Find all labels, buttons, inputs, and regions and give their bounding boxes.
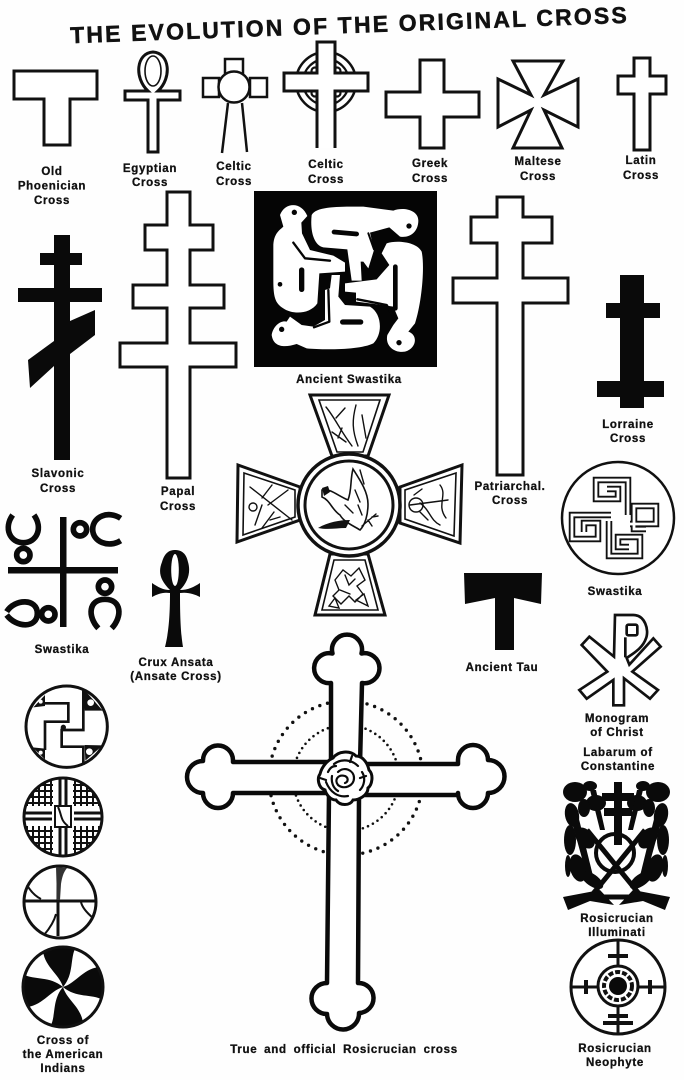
label: Lorraine Cross: Lorraine (602, 419, 654, 431)
label: Maltese Cross: Maltese (514, 156, 562, 168)
panel: Ancient Swastika (254, 191, 437, 386)
cross: Maltese (498, 61, 578, 183)
cross: Papal (120, 192, 236, 513)
emblem: Rosicrucian Illuminati (563, 781, 670, 939)
cross: Old Phoenician (14, 71, 97, 207)
cross: true and official Rosicrucian cross (187, 635, 504, 1056)
left foliage (563, 781, 614, 910)
medal rings (298, 454, 400, 556)
label: Swastika: Swastika (35, 644, 89, 656)
creases and eyes (293, 232, 395, 327)
label: Greek Cross: Greek (412, 158, 448, 170)
corner marks (33, 689, 103, 761)
medal: cross with dove (237, 395, 462, 615)
label: Celtic Cross ring: Celtic (308, 159, 344, 171)
label: Labarum of Constantine: Constantine (581, 761, 655, 773)
label: Old Phoenician Cross: Old (41, 166, 63, 178)
cross: Celtic (203, 59, 267, 188)
label: Rosicrucian Illuminati: Illuminati (588, 927, 646, 939)
label: Celtic Cross: Cross (216, 176, 252, 188)
label: Papal Cross: Cross (160, 501, 196, 513)
label: Ancient Tau: Ancient Tau (466, 662, 538, 674)
emblem: Indian cross one (26, 686, 107, 767)
label: Old Phoenician Cross: Cross (34, 195, 70, 207)
label: Egyptian Cross: Cross (132, 177, 168, 189)
label: Rosicrucian Neophyte: Rosicrucian (578, 1043, 652, 1055)
label: Celtic Cross: Celtic (216, 161, 252, 173)
cross: Lorraine (597, 275, 664, 445)
label: Egyptian Cross: Egyptian (123, 163, 177, 175)
label: Labarum of Constantine: Labarum of (583, 747, 653, 759)
label: Swastika right: Swastika (588, 586, 642, 598)
medal arms (237, 395, 462, 615)
label: Cross of the American Indians: Cross of (37, 1035, 89, 1047)
label: Papal Cross: Papal (161, 486, 195, 498)
label: True and official Rosicrucian cross: True and official Rosicrucian cross (230, 1044, 458, 1056)
label: Crux Ansata: (Ansate Cross) (130, 671, 222, 683)
label: Slavonic Cross: Slavonic (32, 468, 84, 480)
central cross (602, 782, 634, 845)
symbol: Monogram of Christ (579, 615, 661, 739)
cross: Egyptian (123, 52, 180, 189)
cross: Celtic ring (284, 42, 368, 186)
icon: rose centre (598, 966, 638, 1006)
foliage: arm engravings (249, 405, 448, 608)
label: Rosicrucian Illuminati: Rosicrucian (580, 913, 654, 925)
icon: rose (318, 752, 372, 804)
symbol: Crux Ansata (130, 550, 222, 683)
symbol: Swastika with crescents (7, 515, 121, 656)
label: Cross of the American Indians: the American (23, 1049, 103, 1061)
label: Lorraine Cross: Cross (610, 433, 646, 445)
emblem: Indian cross quartered (24, 866, 96, 938)
emblem: Indian cross grid (23, 777, 103, 857)
title: THE EVOLUTION OF THE ORIGINAL CROSS (70, 2, 628, 48)
dotted rings (269, 701, 423, 855)
label: Crux Ansata: Crux Ansata (138, 657, 214, 669)
label: Greek Cross: Cross (412, 173, 448, 185)
label: Slavonic Cross: Cross (40, 483, 76, 495)
label: Patriarchal Cross: Patriarchal. (474, 481, 546, 493)
symbol: meander Swastika (562, 462, 674, 598)
symbol: Ancient Tau (464, 573, 542, 674)
label: Latin Cross: Latin (626, 155, 656, 167)
ornaments (7, 515, 121, 628)
emblem: Rosicrucian Neophyte (571, 940, 665, 1069)
cross: Patriarchal (453, 197, 568, 507)
label: Old Phoenician Cross: Phoenician (18, 180, 86, 192)
ring fillets (312, 68, 340, 96)
meander arms (572, 480, 656, 556)
emblem: pinwheel and American Indians label (21, 945, 105, 1075)
cross: Greek (386, 60, 479, 185)
right foliage (619, 781, 670, 910)
label: Patriarchal Cross: Cross (492, 495, 528, 507)
label: Maltese Cross: Cross (520, 171, 556, 183)
cross: Slavonic (18, 235, 102, 495)
label: Monogram of Christ: Monogram (585, 713, 649, 725)
label: Latin Cross: Cross (623, 170, 659, 182)
label: Celtic Cross ring: Cross (308, 174, 344, 186)
figures: four bodies (272, 205, 423, 352)
cross: Latin (618, 58, 666, 182)
corner wedges (56, 867, 67, 900)
label: Cross of the American Indians: Indians (40, 1063, 86, 1075)
label: Rosicrucian Neophyte: Neophyte (586, 1057, 644, 1069)
label: Monogram of Christ: of Christ (590, 727, 644, 739)
label: Ancient Swastika: Ancient Swastika (296, 374, 402, 386)
icon: dove (318, 469, 378, 530)
cross outline (187, 635, 504, 1029)
